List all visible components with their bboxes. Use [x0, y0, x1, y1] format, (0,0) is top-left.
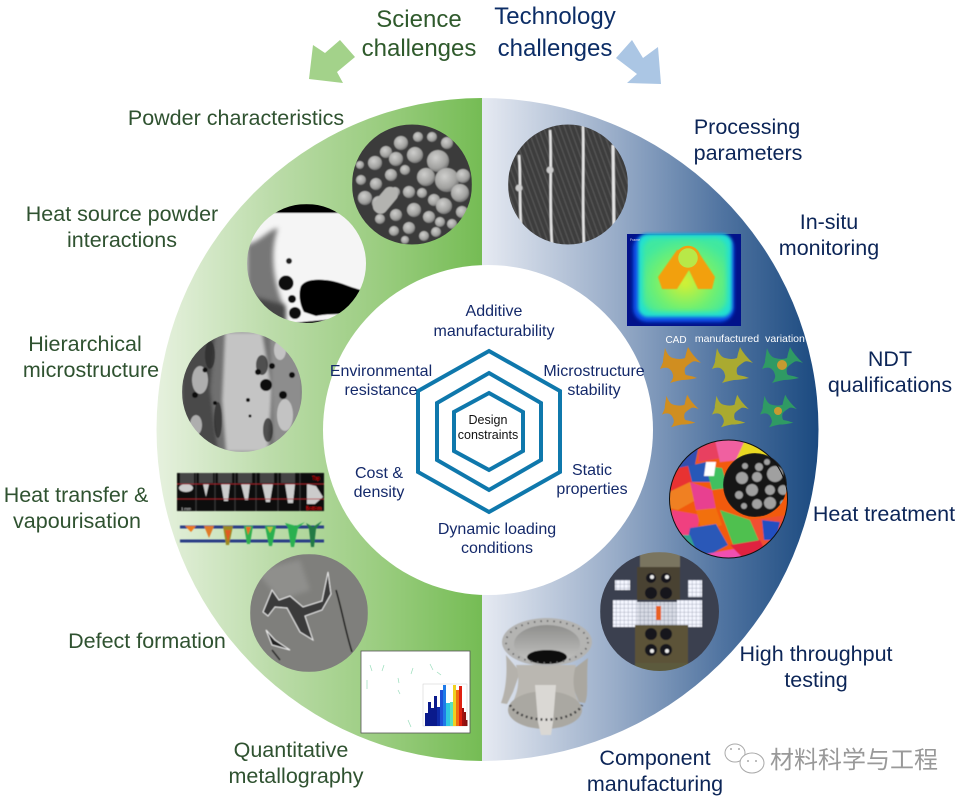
label: quantitative metallography: Quantitative	[234, 738, 348, 762]
watermark text: 材料科学与工程	[770, 747, 938, 774]
image ring: EBSD outline	[670, 440, 788, 558]
label: processing parameters: parameters	[694, 141, 802, 165]
label: variation: variation	[765, 333, 805, 345]
label: hierarchical microstructure: Hierarchical	[28, 332, 142, 356]
label: design constraints: constraints	[458, 428, 518, 442]
label: heat transfer and vapourisation: Heat transfer &	[4, 483, 148, 507]
label: heat treatment: Heat treatment	[813, 502, 955, 526]
label: static properties: Static	[572, 462, 612, 479]
panel: science half ring	[157, 98, 482, 761]
arrow: technology	[616, 40, 661, 84]
label: dynamic loading conditions	[438, 521, 556, 557]
label: high throughput testing	[740, 642, 893, 692]
label: CAD: CAD	[665, 335, 687, 346]
image: melt pool strip: 1 mm	[181, 506, 192, 511]
label: cost and density: Cost &	[355, 465, 403, 482]
label: additive manufacturability: Additive	[466, 303, 523, 320]
heading: technology challenges: challenges	[498, 35, 612, 62]
label: in-situ monitoring: In-situ	[800, 210, 858, 234]
label: microstructure stability	[543, 363, 645, 399]
label: environmental resistance: resistance	[345, 382, 418, 399]
label: quantitative metallography	[228, 738, 364, 788]
label: cost and density	[354, 465, 404, 501]
image: defect micrograph	[250, 554, 368, 672]
image: melt pool strip	[177, 473, 324, 512]
hexagons: design constraints	[418, 351, 560, 512]
label: heat source powder interactions: Heat source powder	[26, 202, 218, 226]
label: dynamic loading conditions: Dynamic loading	[438, 521, 556, 538]
label: design constraints	[458, 413, 518, 442]
label: NDT qualifications: qualifications	[828, 373, 952, 397]
label: environmental resistance: Environmental	[330, 363, 432, 380]
panel: central white circle	[323, 265, 653, 595]
label: high throughput testing: High throughput	[740, 642, 893, 666]
label: heat transfer and vapourisation	[4, 483, 148, 533]
label: NDT qualifications: NDT	[868, 347, 912, 371]
label: microstructure stability: stability	[567, 382, 621, 399]
label: NDT qualifications	[828, 347, 952, 397]
image: manufactured component	[501, 618, 592, 735]
heading: science challenges	[362, 6, 476, 62]
image: EBSD grain map	[669, 440, 789, 562]
image: NDT CAD comparison	[660, 333, 805, 427]
label: static properties: properties	[556, 481, 628, 498]
label: heat transfer and vapourisation: vapourisation	[13, 509, 141, 533]
image: hierarchical microstructure	[182, 332, 302, 452]
label: hierarchical microstructure	[23, 332, 159, 382]
label: manufactured: manufactured	[695, 333, 759, 345]
label: additive manufacturability	[434, 303, 554, 340]
panel: technology half ring	[482, 98, 819, 761]
image: melt pool strip: Top	[312, 476, 320, 482]
label: heat source powder interactions	[26, 202, 218, 252]
label: component manufacturing: manufacturing	[587, 772, 723, 796]
label: microstructure stability: Microstructure	[543, 363, 645, 380]
image: powder particles	[352, 124, 472, 245]
image: melt pool strip: Bottom	[306, 506, 322, 512]
label: cost and density: density	[354, 484, 404, 501]
label: in-situ monitoring	[779, 210, 879, 260]
label: component manufacturing: Component	[599, 746, 711, 770]
label: defect formation: Defect formation	[68, 629, 226, 653]
bar chart: histogram	[423, 684, 468, 726]
label: high throughput testing: testing	[784, 668, 848, 692]
heading: technology challenges: Technology	[494, 3, 616, 30]
image: in-situ thermal map: Frame	[630, 238, 640, 242]
icon: wechat watermark	[725, 744, 764, 773]
image: high throughput testing rig	[600, 552, 720, 673]
heading: science challenges: challenges	[362, 35, 476, 62]
label: heat source powder interactions: interactions	[67, 228, 177, 252]
label: processing parameters: Processing	[694, 115, 800, 139]
image: heat source melt pool	[247, 204, 367, 325]
image: simulated melt pool strip	[180, 521, 324, 547]
label: static properties	[556, 462, 628, 498]
image: quantitative metallography	[361, 651, 470, 733]
image: EBSD inset powder	[723, 453, 788, 517]
label: additive manufacturability: manufacturability	[434, 323, 554, 340]
label: design constraints: Design	[469, 413, 507, 427]
label: in-situ monitoring: monitoring	[779, 236, 879, 260]
heading: technology challenges	[494, 3, 616, 62]
label: processing parameters	[694, 115, 802, 165]
label: dynamic loading conditions: conditions	[461, 540, 533, 557]
arrow: science	[309, 40, 355, 83]
label: quantitative metallography: metallography	[228, 764, 364, 788]
image: laser tracks	[508, 124, 628, 245]
label: environmental resistance	[330, 363, 432, 399]
label: hierarchical microstructure: microstructure	[23, 358, 159, 382]
label: component manufacturing	[587, 746, 723, 796]
heading: science challenges: Science	[376, 6, 462, 33]
label: powder characteristics: Powder characteristics	[128, 106, 344, 130]
image: in-situ thermal map	[627, 234, 741, 326]
